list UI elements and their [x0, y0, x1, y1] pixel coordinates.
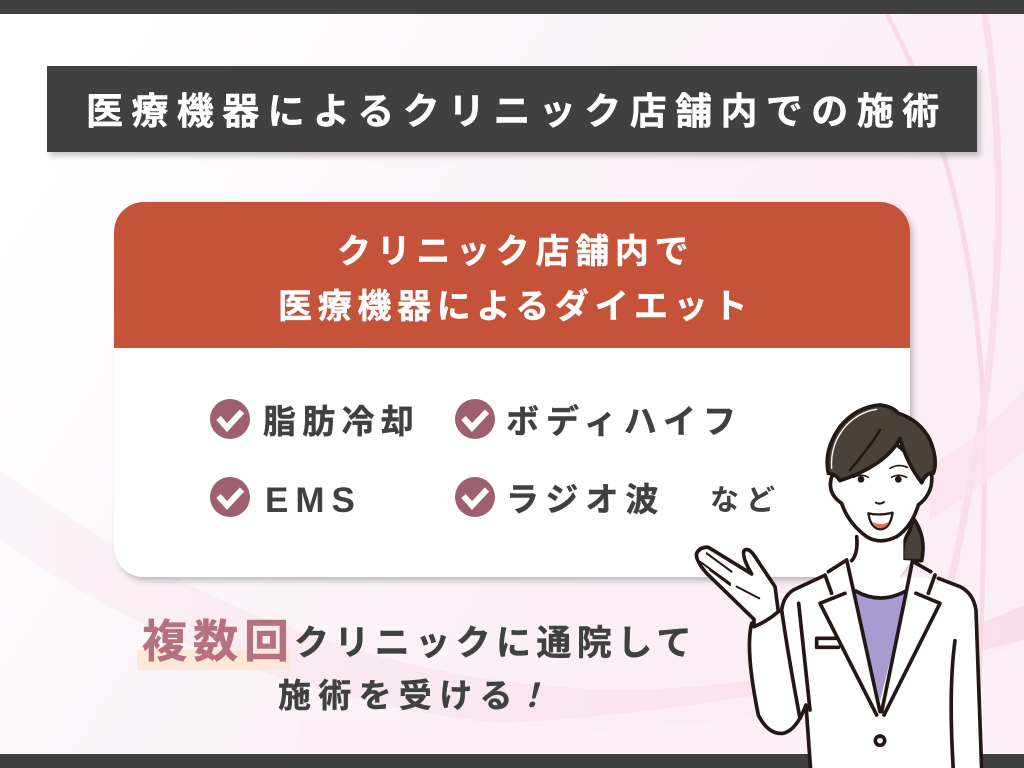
ponytail [902, 518, 923, 561]
mouth [868, 513, 893, 529]
title banner [47, 66, 977, 152]
callout text [137, 616, 697, 714]
hand [696, 547, 778, 627]
text: etc: など [710, 484, 782, 517]
item: EMS [210, 477, 362, 520]
card header: クリニック店舗内で [337, 233, 694, 271]
panel: clinic diet card [114, 202, 910, 577]
hair highlight [832, 409, 877, 468]
eyes [858, 476, 864, 483]
hair [827, 405, 935, 483]
item: ボディハイフ: ボディハイフ [506, 403, 743, 440]
callout text: ！ [515, 677, 548, 714]
coat [749, 560, 982, 768]
card header [114, 202, 910, 348]
item: ラジオ波: ラジオ波 [506, 481, 665, 518]
lapels [847, 560, 880, 712]
neck [852, 530, 912, 603]
name tag [817, 638, 838, 647]
bottom bar [0, 754, 1024, 768]
item: ラジオ波 [455, 477, 665, 518]
illustration: woman in white coat [696, 405, 982, 768]
nose [876, 502, 884, 504]
highlight [137, 650, 290, 670]
shirt [855, 592, 907, 702]
callout text: 複数回 [142, 616, 295, 667]
callout text: クリニックに通院して [294, 624, 697, 663]
button [875, 736, 885, 745]
head [830, 430, 932, 541]
card header: 医療機器によるダイエット [278, 287, 753, 326]
top bar [0, 0, 1024, 14]
item: EMS: EMS [265, 481, 362, 520]
title banner: 医療機器によるクリニック店舗内での施術 [86, 91, 948, 132]
item: 脂肪冷却 [210, 399, 420, 440]
item: 脂肪冷却: 脂肪冷却 [263, 403, 420, 440]
callout text: 施術を受ける [278, 677, 520, 714]
sleeve lines [782, 603, 955, 768]
